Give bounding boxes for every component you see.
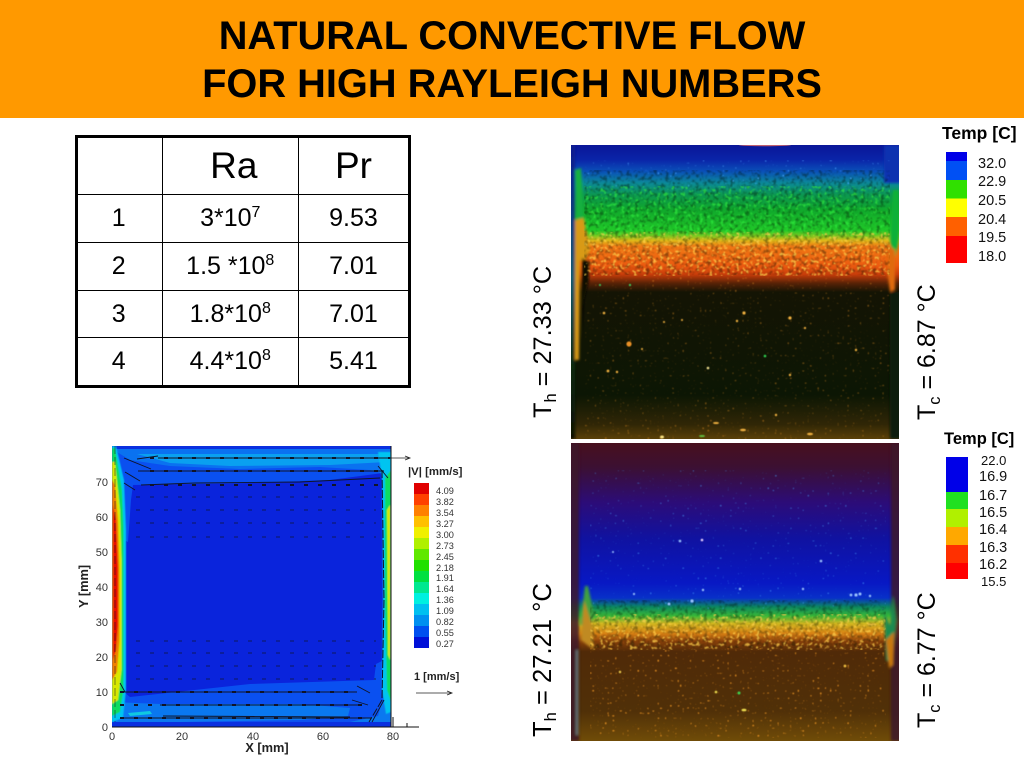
grain [584, 170, 890, 275]
table: Ra and Pr values: 1.5 *108 [186, 252, 274, 280]
table: Ra and Pr values: Pr [335, 145, 372, 186]
y axis labels: 10 [96, 687, 108, 699]
header band [0, 0, 1024, 118]
y axis labels: 70 [96, 477, 108, 489]
velocity color bar [414, 483, 429, 648]
legend values: 22.0 [981, 453, 1006, 468]
velocity color bar values: 0.27 [436, 639, 454, 649]
x axis labels: 0 [109, 731, 115, 743]
x axis labels: 40 [247, 731, 259, 743]
velocity arrows [115, 446, 412, 722]
velocity contour chart [76, 446, 463, 755]
label: upper cold temperature: T [913, 405, 941, 420]
table: Ra and Pr values: 1 [112, 204, 126, 232]
table: Ra and Pr values: 7.01 [329, 252, 378, 280]
legend swatches [946, 152, 967, 263]
label: lower hot temperature: h [542, 712, 560, 721]
velocity color bar values: 1.09 [436, 606, 454, 616]
table: Ra and Pr values: 3*107 [200, 204, 260, 232]
table: Ra and Pr values: 9.53 [329, 204, 378, 232]
label: lower hot temperature: T [529, 721, 557, 737]
color legend: upper photo [942, 123, 1017, 265]
top wall highlight [739, 145, 791, 146]
axis lines and ticks [112, 446, 419, 727]
legend values [979, 453, 1007, 589]
label: upper hot temperature: T [529, 403, 557, 418]
x axis title: X [mm] [245, 740, 289, 755]
velocity color bar values: 1.91 [436, 573, 454, 583]
velocity color bar values [436, 486, 454, 649]
photo: lower temperature field [569, 443, 901, 741]
legend values: 16.5 [979, 505, 1007, 521]
figures [78, 126, 1016, 754]
right wall boundary layer [378, 452, 391, 714]
velocity color bar values: 3.27 [436, 519, 454, 529]
table: Ra and Pr values [75, 135, 411, 388]
title [202, 14, 822, 106]
table: Ra and Pr values: Ra [210, 145, 257, 186]
reference vector arrow [416, 691, 452, 695]
velocity color bar values: 2.45 [436, 552, 454, 562]
core of low velocity [124, 473, 385, 697]
y axis labels [96, 477, 108, 734]
table: Ra and Pr values: 3 [112, 300, 126, 328]
legend title: Temp [C] [942, 123, 1017, 143]
wall plumes [569, 145, 901, 439]
y axis labels: 60 [96, 512, 108, 524]
x axis labels: 20 [176, 731, 188, 743]
table: Ra and Pr values: 4.4*108 [190, 347, 271, 375]
velocity color bar values: 3.00 [436, 530, 454, 540]
label: upper cold temperature: c [926, 396, 944, 405]
bright particles [599, 284, 857, 438]
table: Ra and Pr values: 1.8*108 [190, 300, 271, 328]
label: lower cold temperature: = 6.77 °C [913, 592, 941, 704]
title: NATURAL CONVECTIVE FLOW [219, 14, 805, 58]
y axis labels: 0 [102, 722, 108, 734]
grain [590, 600, 886, 648]
velocity color bar values: 2.73 [436, 541, 454, 551]
y axis title: Y [mm] [76, 565, 91, 608]
legend title: Temp [C] [944, 430, 1014, 448]
legend values: 16.3 [979, 540, 1007, 556]
wall plumes [569, 443, 901, 741]
x axis labels: 80 [387, 731, 399, 743]
velocity color bar values: 1.64 [436, 584, 454, 594]
top-row arrow overflow [391, 456, 410, 460]
velocity color bar values: 3.82 [436, 497, 454, 507]
legend values: 22.9 [978, 174, 1006, 190]
title: FOR HIGH RAYLEIGH NUMBERS [202, 62, 822, 106]
contour field [112, 446, 412, 727]
velocity color bar values: 1.36 [436, 595, 454, 605]
legend values: 16.4 [979, 522, 1007, 538]
legend values: 32.0 [978, 156, 1006, 172]
velocity color bar values: 3.54 [436, 508, 454, 518]
x axis labels: 60 [317, 731, 329, 743]
velocity legend title: |V| [mm/s] [408, 466, 463, 478]
photo: upper temperature field [569, 144, 901, 439]
table: Ra and Pr values: 4 [112, 347, 126, 375]
velocity color bar values: 4.09 [436, 486, 454, 496]
table: Ra and Pr values: 7.01 [329, 300, 378, 328]
legend values: 18.0 [978, 249, 1006, 265]
legend swatches [946, 457, 968, 579]
legend values: 15.5 [981, 574, 1006, 589]
label: lower hot temperature: = 27.21 °C [529, 583, 557, 712]
label: upper hot temperature: = 27.33 °C [529, 266, 557, 393]
legend values: 16.9 [979, 469, 1007, 485]
legend values: 16.7 [979, 488, 1007, 504]
legend values: 20.5 [978, 193, 1006, 209]
y axis labels: 20 [96, 652, 108, 664]
velocity color bar values: 2.18 [436, 563, 454, 573]
y axis labels: 50 [96, 547, 108, 559]
label: lower cold temperature: T [913, 713, 941, 728]
label: upper cold temperature: = 6.87 °C [913, 284, 941, 396]
left wall boundary layer [112, 446, 126, 722]
table: Ra and Pr values: 5.41 [329, 347, 378, 375]
y axis labels: 40 [96, 582, 108, 594]
table: Ra and Pr values: 2 [112, 252, 126, 280]
label: upper hot temperature: h [542, 393, 560, 403]
x axis labels [109, 731, 399, 743]
legend values: 16.2 [979, 557, 1007, 573]
reference vector label: 1 [mm/s] [414, 671, 460, 683]
velocity color bar values: 0.82 [436, 617, 454, 627]
velocity color bar values: 0.55 [436, 628, 454, 638]
label: lower cold temperature: c [926, 704, 944, 713]
legend values: 20.4 [978, 212, 1006, 228]
y axis labels: 30 [96, 617, 108, 629]
bright particles [612, 539, 871, 711]
legend values: 19.5 [978, 230, 1006, 246]
legend values [978, 156, 1006, 265]
color legend: lower photo [944, 430, 1014, 589]
